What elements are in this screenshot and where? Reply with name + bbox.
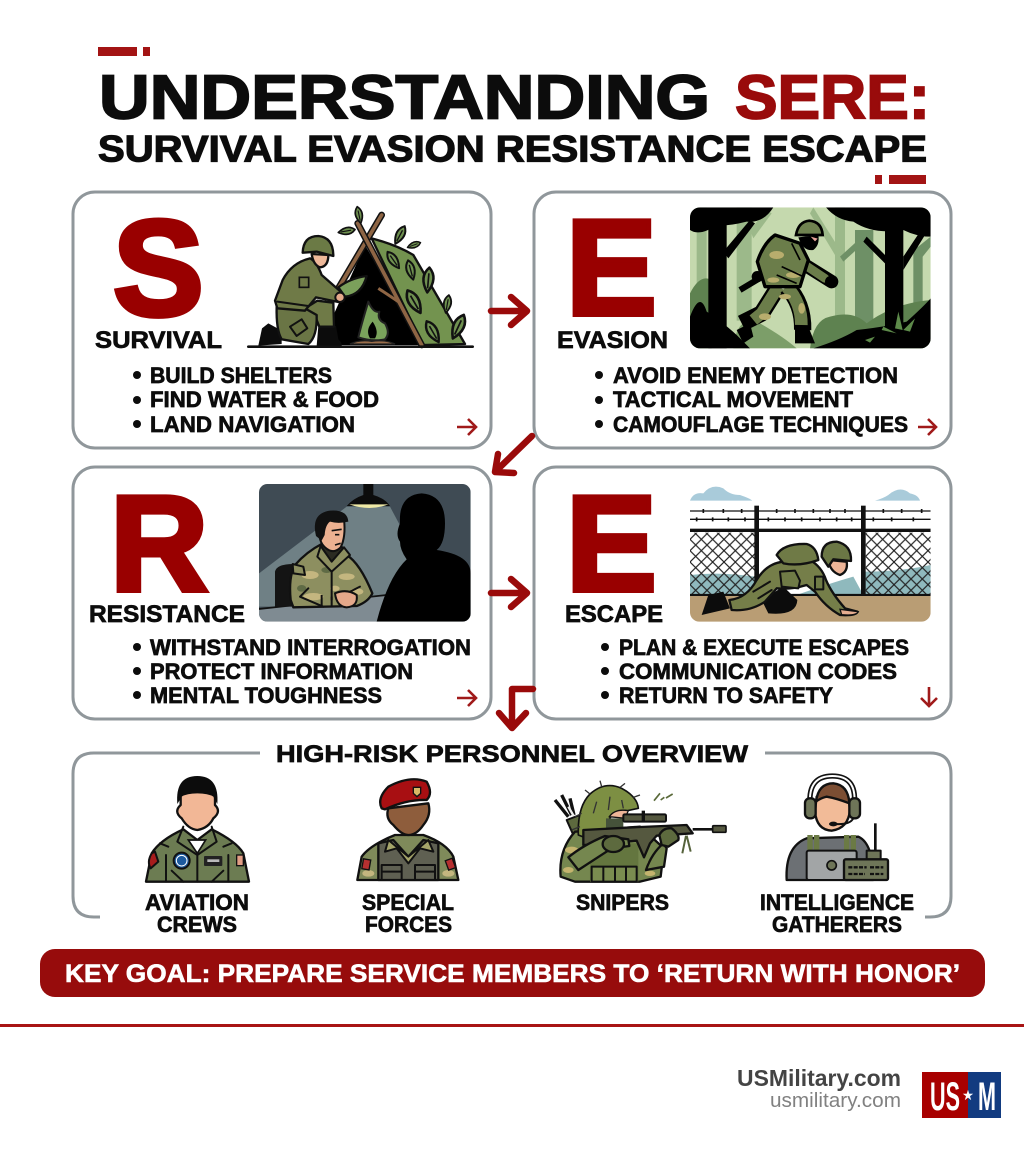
bullet list: survival: LAND NAVIGATION (150, 412, 355, 437)
logo: US star M: ★ (962, 1088, 974, 1104)
bullet list: escape (601, 635, 909, 708)
panel: survival (73, 192, 491, 448)
section heading: HIGH-RISK PERSONNEL OVERVIEW (276, 741, 749, 768)
bullet list: survival: FIND WATER & FOOD (150, 387, 379, 412)
label snipers: SNIPERS (576, 890, 669, 915)
letter S: S (113, 192, 204, 344)
illustration: interrogation scene (259, 484, 471, 622)
arrow: survival to evasion (491, 297, 527, 325)
bullet list: resistance (133, 635, 471, 708)
footer divider (0, 1024, 1024, 1027)
bullet list: escape: COMMUNICATION CODES (619, 659, 897, 684)
letter R: R (110, 468, 208, 620)
bullet list: evasion: TACTICAL MOVEMENT (613, 387, 854, 412)
arrow: evasion to resistance (495, 436, 532, 473)
bullet list: evasion: AVOID ENEMY DETECTION (613, 363, 898, 388)
icon: special forces soldier (357, 779, 458, 880)
logo: US star M: US (930, 1075, 960, 1119)
title line 2: SURVIVAL EVASION RESISTANCE ESCAPE (98, 128, 927, 170)
label intelligence gatherers: INTELLIGENCE (760, 890, 914, 915)
arrow: resistance to escape (491, 579, 527, 607)
icon: intelligence gatherer with radio (787, 776, 888, 880)
title line 1: UNDERSTANDING (99, 64, 710, 132)
panel: evasion (534, 192, 951, 448)
bullet list: survival: BUILD SHELTERS (150, 363, 332, 388)
label survival: SURVIVAL (95, 327, 222, 354)
label special forces: FORCES (365, 912, 452, 937)
title block (98, 47, 930, 184)
illustration: soldier evading in jungle (690, 207, 931, 348)
footer brand text: usmilitary.com (770, 1090, 901, 1112)
footer brand text (737, 1065, 901, 1112)
letter E: E (566, 468, 657, 620)
small arrow (918, 419, 936, 435)
bullet list: evasion (595, 363, 908, 437)
illustration: soldier crawling under fence (690, 487, 931, 623)
bullet list: evasion: CAMOUFLAGE TECHNIQUES (613, 412, 908, 437)
icon: aviation crew member (146, 776, 249, 882)
label aviation crews: CREWS (157, 912, 237, 937)
small arrow (457, 690, 476, 706)
bullet list: resistance: WITHSTAND INTERROGATION (150, 635, 471, 660)
label intelligence gatherers: GATHERERS (772, 912, 902, 937)
small down arrow (921, 687, 937, 706)
bullet list: resistance: MENTAL TOUGHNESS (150, 683, 382, 708)
label special forces (362, 890, 454, 937)
label escape: ESCAPE (565, 601, 663, 628)
illustration: soldier building shelter (248, 206, 473, 347)
label special forces: SPECIAL (362, 890, 454, 915)
panel: high-risk personnel overview (73, 741, 951, 937)
bullet list: escape: RETURN TO SAFETY (619, 683, 833, 708)
accent bars bottom (875, 175, 926, 184)
logo: US star M: M (978, 1075, 996, 1119)
arrow: escape down to personnel overview (499, 689, 533, 728)
label evasion: EVASION (557, 327, 668, 354)
bullet list: resistance: PROTECT INFORMATION (150, 659, 413, 684)
panel: escape (534, 467, 951, 719)
key goal banner (40, 949, 985, 997)
footer brand text: USMilitary.com (737, 1065, 901, 1091)
title line 1: SERE: (735, 64, 930, 132)
label intelligence gatherers (760, 890, 914, 937)
icon: camouflaged sniper (555, 781, 726, 882)
key goal banner: KEY GOAL: PREPARE SERVICE MEMBERS TO ‘RETURN WITH HONOR’ (65, 960, 960, 988)
small arrow (457, 419, 476, 435)
label resistance: RESISTANCE (89, 601, 245, 628)
label aviation crews (145, 890, 249, 937)
panel: resistance (73, 467, 491, 719)
bullet list: escape: PLAN & EXECUTE ESCAPES (619, 635, 909, 660)
label aviation crews: AVIATION (145, 890, 249, 915)
bullet list: survival (133, 363, 379, 437)
decorative accent bars top (98, 47, 150, 56)
logo: US star M (922, 1072, 1001, 1119)
letter E: E (566, 192, 657, 344)
